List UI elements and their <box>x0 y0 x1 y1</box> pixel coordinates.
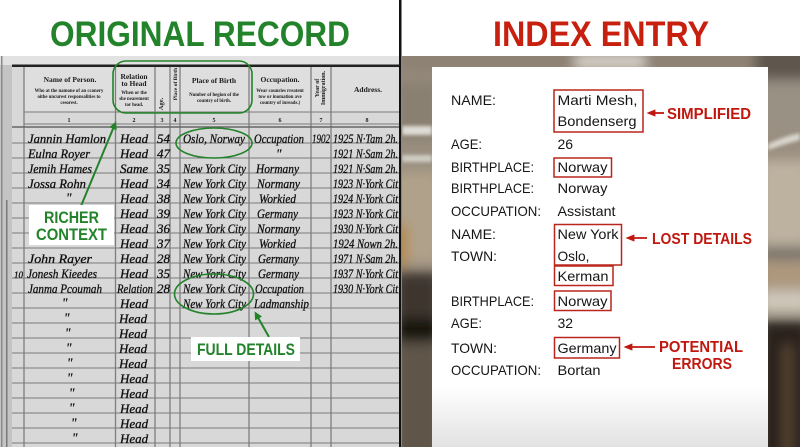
handwritten occupations <box>253 131 309 311</box>
handwritten relations: Head <box>119 266 149 281</box>
table column headers <box>35 68 382 124</box>
callout: full details <box>191 337 300 361</box>
handwritten places of birth: New York City <box>182 221 246 236</box>
field values: Bondenserg <box>558 113 636 129</box>
table column headers: Place of Birth <box>192 76 237 85</box>
handwritten relations: Head <box>119 386 149 401</box>
handwritten ages: 39 <box>156 206 170 221</box>
arrow: richer context <box>81 124 115 206</box>
callout: richer context <box>29 205 114 245</box>
red highlight boxes <box>554 90 643 358</box>
callout: simplified: SIMPLIFIED <box>667 106 751 123</box>
panel: original record <box>0 15 399 447</box>
handwritten names: John Rayer <box>28 251 93 266</box>
table column headers: tow or inomation ave <box>258 95 302 100</box>
center divider <box>399 0 402 447</box>
handwritten addresses: 1923 N·York Cit <box>333 176 398 191</box>
field labels <box>451 92 541 378</box>
handwritten addresses: 1923 N·York Cit <box>333 206 398 221</box>
arrow: lost details <box>629 237 647 239</box>
handwritten relations: Head <box>119 131 149 146</box>
table column headers: 6 <box>278 118 282 124</box>
handwritten names: " <box>65 325 71 340</box>
field values: Norway <box>558 293 608 309</box>
handwritten occupations: Workied <box>259 191 296 206</box>
handwritten relations: Head <box>119 206 149 221</box>
handwritten names: Jannin Hamlon <box>28 131 106 146</box>
callout: richer context: CONTEXT <box>36 226 107 244</box>
handwritten places of birth: Oslo, Norway <box>183 131 245 146</box>
table column headers: Number of hegion of the <box>189 93 239 98</box>
field values: New York <box>558 226 620 242</box>
handwritten occupations: Germany <box>258 251 299 266</box>
handwritten names: Jossa Rohn <box>28 176 86 191</box>
table column headers: Age. <box>158 97 165 110</box>
field values: 26 <box>558 136 573 152</box>
table column headers: Wear counries rreatent <box>256 89 304 94</box>
scanned census form <box>0 56 399 447</box>
table column headers: she nearement <box>119 97 149 102</box>
handwritten addresses: 1971 N·Sam 2h. <box>333 251 398 266</box>
table column headers: 4 <box>174 118 176 124</box>
handwritten places of birth: New York City <box>182 281 246 296</box>
handwritten places of birth <box>182 131 246 311</box>
white index card <box>432 67 768 447</box>
table column headers: Who at the namone of an cconery <box>35 89 104 94</box>
highlight: relation to place of birth headers <box>113 61 252 113</box>
table column headers: tor head. <box>125 103 143 108</box>
handwritten relations: Head <box>119 176 149 191</box>
table column headers: Address. <box>354 85 382 94</box>
callout: richer context: RICHER <box>44 209 99 227</box>
handwritten relations: Head <box>119 146 149 161</box>
highlight: New York City entries <box>174 274 254 314</box>
field values: Marti Mesh, <box>558 92 638 108</box>
handwritten addresses: 1921 N·Sam 2h. <box>333 146 398 161</box>
handwritten ages: 34 <box>156 176 170 191</box>
handwritten places of birth: New York City <box>182 236 246 251</box>
handwritten occupations: Occupation <box>255 281 304 296</box>
table column headers: country of inreads.) <box>260 101 301 106</box>
table column headers: Name of Person. <box>44 75 96 84</box>
table column headers: 3 <box>160 118 164 124</box>
handwritten names: Janma Pcoumah <box>28 281 102 296</box>
field labels: TOWN: <box>451 340 497 356</box>
field labels: BIRTHPLACE: <box>451 180 534 196</box>
handwritten names: " <box>67 355 73 370</box>
field values: Norway <box>558 159 608 175</box>
table column headers: country of birth. <box>197 99 231 104</box>
table column headers: 7 <box>320 118 322 124</box>
handwritten relations <box>116 131 153 446</box>
field values: 32 <box>558 315 573 331</box>
handwritten ages: 28 <box>157 251 170 266</box>
title: original record: ORIGINAL RECORD <box>50 15 350 54</box>
handwritten relations: Head <box>119 251 149 266</box>
handwritten relations: Head <box>119 296 149 311</box>
handwritten names: " <box>69 385 75 400</box>
arrow: full details <box>256 314 269 337</box>
field values <box>558 92 638 378</box>
handwritten addresses: 1924 N·York Cit <box>333 191 398 206</box>
handwritten addresses <box>333 131 398 296</box>
handwritten names: " <box>62 295 68 310</box>
field values: Kerman <box>558 268 608 284</box>
table column headers: cesorest. <box>60 101 78 106</box>
handwritten relations: Head <box>119 221 149 236</box>
table column headers: Relation <box>120 72 148 81</box>
highlight: Oslo, Norway <box>176 128 252 158</box>
field values: Assistant <box>558 203 616 219</box>
handwritten names: Jonesh Kieedes <box>27 266 97 281</box>
panel: index entry <box>395 15 800 447</box>
field labels: BIRTHPLACE: <box>451 293 534 309</box>
table column headers: Immigration. <box>321 70 327 105</box>
handwritten occupations: Workied <box>259 236 296 251</box>
handwritten immigration year: 1902 <box>312 131 330 146</box>
handwritten names: Jemih Hames <box>28 161 92 176</box>
field labels: AGE: <box>451 315 482 331</box>
handwritten addresses: 1924 Nown 2h. <box>333 236 398 251</box>
field labels: OCCUPATION: <box>451 362 541 378</box>
handwritten relations: Head <box>119 401 149 416</box>
handwritten ages: 38 <box>156 191 170 206</box>
table column headers: When or the <box>121 91 147 96</box>
table column headers: 8 <box>366 118 368 124</box>
callout: lost details: LOST DETAILS <box>652 231 752 248</box>
field labels: AGE: <box>451 136 482 152</box>
handwritten occupations: Germany <box>257 206 298 221</box>
field values: Norway <box>558 180 608 196</box>
handwritten addresses: 1925 N·Tam 2h. <box>333 131 398 146</box>
table column headers: 5 <box>212 118 216 124</box>
callout: potential errors: POTENTIAL <box>659 339 743 356</box>
handwritten names: " <box>66 190 72 205</box>
field values: Germany <box>558 340 616 356</box>
blurred office background <box>402 56 800 447</box>
handwritten places of birth: New York City <box>182 266 246 281</box>
handwritten occupations: Occupation <box>254 131 304 146</box>
handwritten relations: Relation <box>116 281 153 296</box>
handwritten relations: Head <box>119 431 149 446</box>
handwritten names <box>14 131 106 445</box>
handwritten ages: 35 <box>156 161 170 176</box>
handwritten relations: Head <box>119 371 149 386</box>
handwritten places of birth: New York City <box>182 206 246 221</box>
table column headers: 2 <box>132 118 136 124</box>
handwritten places of birth: New York City <box>182 251 246 266</box>
field labels: NAME: <box>451 226 496 242</box>
callout: full details: FULL DETAILS <box>197 341 295 359</box>
table column headers: Year of <box>315 78 321 97</box>
handwritten occupations: Normany <box>256 221 300 236</box>
table column headers: 1 <box>68 118 70 124</box>
handwritten relations: Head <box>119 416 149 431</box>
table column headers: oithe uncurest responsalities to <box>37 95 101 100</box>
handwritten names: " <box>69 400 75 415</box>
handwritten relations: Head <box>119 191 149 206</box>
handwritten places of birth: New York City <box>182 191 246 206</box>
handwritten relations: Head <box>118 311 148 326</box>
field labels: TOWN: <box>451 248 497 264</box>
handwritten ages: 35 <box>156 266 170 281</box>
handwritten ages: 37 <box>156 236 170 251</box>
handwritten addresses: 1930 N·York Cit <box>333 221 398 236</box>
callout: potential errors <box>659 339 743 373</box>
field labels: NAME: <box>451 92 496 108</box>
handwritten ages: 54 <box>157 131 170 146</box>
handwritten addresses: 1937 N·York Cit <box>333 266 398 281</box>
table column headers: Place of Birth <box>173 68 179 100</box>
handwritten names: " <box>71 415 77 430</box>
handwritten names: " <box>64 310 70 325</box>
handwritten occupations: Normany <box>256 176 300 191</box>
handwritten places of birth: New York City <box>182 176 246 191</box>
handwritten relations: Head <box>118 326 148 341</box>
handwritten ages <box>156 131 170 296</box>
callout: potential errors: ERRORS <box>672 356 732 373</box>
handwritten addresses: 1930 N·York Cit <box>333 281 398 296</box>
handwritten relations: Head <box>119 236 149 251</box>
handwritten names: " <box>72 430 78 445</box>
table column headers: to Head <box>121 79 147 88</box>
handwritten occupations: Ladmanship <box>253 296 309 311</box>
handwritten names: " <box>66 340 72 355</box>
handwritten relations: Same <box>120 161 148 176</box>
handwritten names: " <box>67 370 73 385</box>
handwritten relations: Head <box>118 341 148 356</box>
arrow: potential errors <box>627 346 655 348</box>
title: index entry: INDEX ENTRY <box>493 15 709 54</box>
handwritten names: Eulna Royer <box>27 146 91 161</box>
arrow: simplified <box>650 112 664 114</box>
handwritten ages: 47 <box>157 146 170 161</box>
handwritten ages: 28 <box>157 281 170 296</box>
handwritten relations: Head <box>118 356 148 371</box>
handwritten names: 10 <box>14 270 24 280</box>
field labels: OCCUPATION: <box>451 203 541 219</box>
handwritten places of birth: New York City <box>182 161 246 176</box>
handwritten addresses: 1921 N·Sam 2h. <box>333 161 398 176</box>
handwritten ages: 36 <box>156 221 170 236</box>
handwritten places of birth: New York City <box>182 296 246 311</box>
handwritten occupations: " <box>276 146 282 161</box>
field values: Oslo, <box>558 248 590 264</box>
table column headers: Occupation. <box>261 75 300 84</box>
field labels: BIRTHPLACE: <box>451 159 534 175</box>
handwritten occupations: Germany <box>258 266 299 281</box>
handwritten occupations: Hormany <box>255 161 299 176</box>
field values: Bortan <box>558 362 600 378</box>
